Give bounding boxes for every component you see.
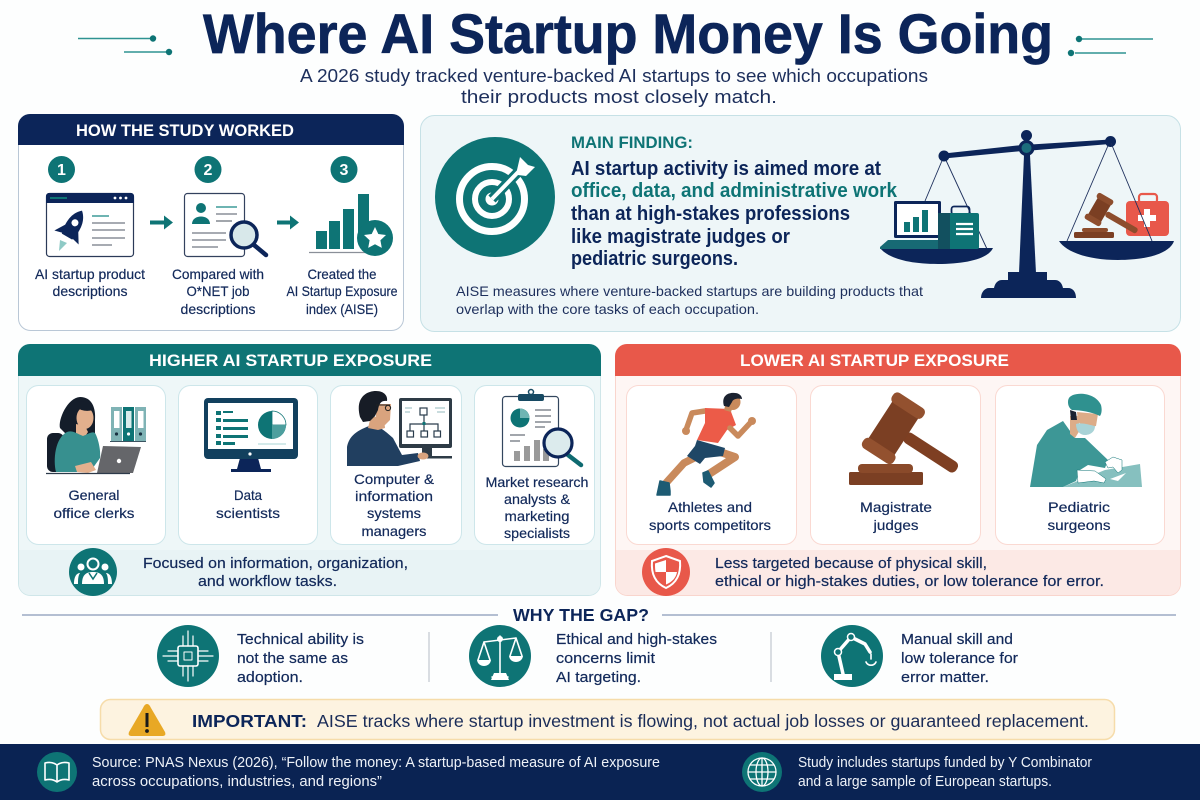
source text	[92, 755, 660, 790]
section heading: why the gap: WHY THE GAP?	[513, 605, 649, 625]
label: office clerks	[54, 505, 134, 521]
icon: surgeon	[1030, 394, 1142, 487]
reason text: error matter.	[901, 669, 989, 686]
step labels: AI startup product	[35, 266, 145, 282]
step labels: descriptions	[52, 283, 128, 299]
reason text: Technical ability is	[237, 631, 364, 648]
AISE explanation: overlap with the core tasks of each occupation.	[456, 301, 759, 317]
label	[649, 499, 771, 533]
note text: Less targeted because of physical skill,	[715, 555, 987, 572]
label: scientists	[216, 505, 280, 521]
circuit decoration left	[78, 35, 172, 55]
reason text: Manual skill and	[901, 631, 1013, 648]
card: market research analysts	[474, 386, 594, 544]
panel: higher AI startup exposure	[18, 344, 601, 596]
icon: job description with magnifier	[184, 194, 266, 256]
reason text: AI targeting.	[556, 669, 641, 686]
header: higher exposure	[18, 344, 601, 376]
main finding heading: MAIN FINDING:	[571, 134, 693, 152]
reason text: Ethical and high-stakes	[556, 631, 717, 648]
circuit decoration right	[1068, 36, 1153, 56]
icon: gavel	[849, 391, 975, 497]
label: General	[68, 487, 120, 503]
label: Pediatric	[1048, 499, 1110, 515]
subtitle: their products most closely match.	[461, 86, 777, 107]
icon: bar chart with star	[309, 194, 393, 256]
title: Where AI Startup Money Is Going	[203, 2, 1053, 65]
step labels: AI Startup Exposure	[286, 283, 398, 299]
study sample text: Study includes startups funded by Y Combinator	[798, 755, 1092, 771]
label	[860, 499, 932, 533]
main finding statement	[571, 157, 898, 270]
label	[54, 487, 134, 521]
subtitle	[300, 65, 928, 107]
label: surgeons	[1048, 517, 1110, 533]
note text	[143, 555, 408, 590]
note text: Focused on information, organization,	[143, 555, 408, 572]
icon: gavel and medical kit	[1074, 143, 1169, 244]
icon: office clerk at laptop	[46, 397, 146, 474]
header: lower exposure: LOWER AI STARTUP EXPOSURE	[740, 351, 1009, 370]
reason text: not the same as	[237, 650, 348, 667]
label: Data	[234, 487, 262, 503]
step labels: O*NET job	[186, 283, 250, 299]
icon: clipboard with magnifier	[502, 390, 581, 466]
main finding statement: office, data, and administrative work	[571, 179, 898, 202]
panel header: how the study worked: HOW THE STUDY WORKED	[76, 122, 294, 140]
source text: Source: PNAS Nexus (2026), “Follow the money: A startup-based measure of AI exposure	[92, 755, 660, 771]
callout text: AISE tracks where startup investment is flowing, not actual job losses or guaranteed replacement.	[317, 711, 1089, 731]
note text: and workflow tasks.	[198, 573, 337, 590]
label: specialists	[504, 525, 570, 541]
panel: how the study worked	[18, 114, 404, 330]
reason: technical ability	[157, 625, 364, 687]
icon: globe	[742, 752, 782, 792]
label	[216, 487, 280, 521]
label: marketing	[504, 508, 570, 524]
icon: balance scale	[880, 130, 1174, 298]
main finding statement: like magistrate judges or	[571, 225, 790, 248]
icon: robot arm	[821, 625, 883, 687]
study sample text: and a large sample of European startups.	[798, 774, 1052, 790]
card: computer and information systems managers	[330, 386, 462, 544]
step 2 number	[194, 156, 222, 183]
note text	[715, 555, 1104, 590]
label: Athletes and	[668, 499, 752, 515]
note band: higher exposure	[19, 548, 600, 596]
label: Computer &	[354, 471, 435, 487]
icon: monitor with charts	[204, 398, 298, 472]
AISE explanation: AISE measures where venture-backed startups are building products that	[456, 283, 923, 299]
note band: lower exposure	[616, 548, 1180, 596]
icon: chip	[157, 625, 219, 687]
card: athletes	[626, 386, 796, 544]
footer	[0, 744, 1200, 800]
label	[1048, 499, 1110, 533]
card: data scientists	[178, 386, 318, 544]
reason text	[556, 631, 717, 686]
main finding statement: pediatric surgeons.	[571, 247, 738, 270]
label: managers	[362, 523, 426, 539]
label: systems	[367, 505, 421, 521]
label: information	[355, 488, 433, 504]
step 3 number: 3	[340, 162, 349, 179]
panel header: how the study worked	[18, 114, 404, 145]
reason text: concerns limit	[556, 650, 656, 667]
reason text	[901, 631, 1018, 686]
icon: book	[37, 752, 77, 792]
icon: scale	[469, 625, 531, 687]
icon: manager at monitor	[347, 391, 452, 466]
label: Market research	[486, 474, 588, 490]
icon: target with arrow	[435, 137, 555, 257]
callout text: IMPORTANT:	[192, 711, 307, 731]
label: sports competitors	[649, 517, 771, 533]
reason: ethical concerns	[469, 625, 717, 687]
icon: warning triangle	[129, 704, 165, 736]
card: magistrate judges	[810, 386, 980, 544]
arrow	[150, 216, 173, 230]
card: general office clerks	[26, 386, 166, 544]
icon: shield	[642, 548, 690, 596]
icon: browser window with rocket	[46, 193, 134, 256]
reason text: low tolerance for	[901, 650, 1018, 667]
icon: runner	[657, 393, 756, 495]
callout: important	[100, 700, 1114, 740]
icon: team	[69, 548, 117, 596]
label: Magistrate	[860, 499, 932, 515]
header: higher exposure: HIGHER AI STARTUP EXPOSURE	[149, 351, 432, 370]
subtitle: A 2026 study tracked venture-backed AI startups to see which occupations	[300, 65, 928, 86]
main finding statement: AI startup activity is aimed more at	[571, 157, 881, 180]
card: pediatric surgeons	[996, 386, 1164, 544]
step 3 number	[330, 156, 358, 183]
main finding statement: than at high-stakes professions	[571, 202, 850, 225]
label	[354, 471, 435, 539]
arrow	[277, 216, 299, 230]
label: analysts &	[504, 491, 571, 507]
reason text: adoption.	[237, 669, 303, 686]
step 1 number	[48, 156, 75, 183]
note text: ethical or high-stakes duties, or low tolerance for error.	[715, 573, 1104, 590]
label: judges	[872, 517, 918, 533]
step labels: descriptions	[180, 301, 256, 317]
step labels	[35, 266, 398, 317]
step 1 number: 1	[57, 162, 66, 179]
reason text	[237, 631, 364, 686]
step 2 number: 2	[204, 162, 213, 179]
source text: across occupations, industries, and regions”	[92, 774, 382, 790]
step labels: Created the	[308, 266, 377, 282]
step labels: Compared with	[172, 266, 264, 282]
panel: lower AI startup exposure	[615, 344, 1181, 596]
header: lower exposure	[615, 344, 1181, 376]
panel: main finding	[420, 116, 1180, 332]
label	[486, 474, 588, 541]
step labels: index (AISE)	[306, 301, 378, 317]
icon: laptop and briefcase	[880, 201, 979, 249]
study sample text	[798, 755, 1092, 790]
reason: manual skill	[821, 625, 1018, 687]
AISE explanation	[456, 283, 923, 317]
